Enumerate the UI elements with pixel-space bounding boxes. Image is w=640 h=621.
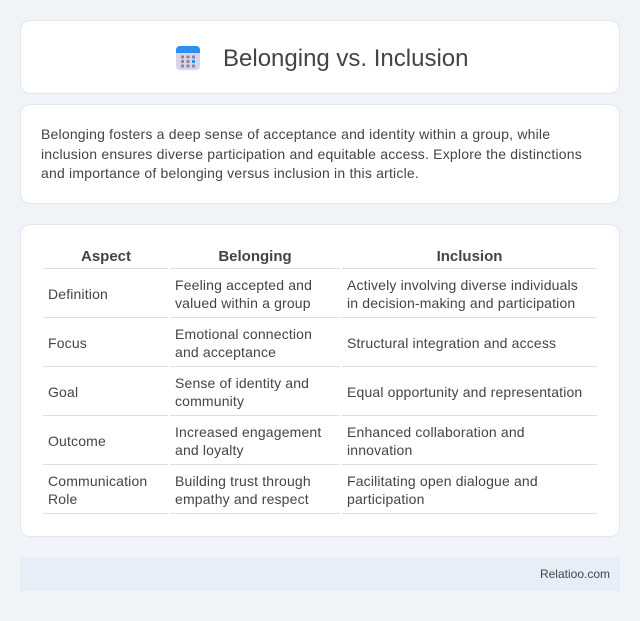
table header: Belonging: Belonging: [218, 248, 292, 265]
row: Communication Role: Communication: [48, 473, 147, 489]
Outcome: Inclusion: innovation: [347, 442, 412, 458]
Goal: Belonging: community: [175, 393, 244, 409]
Goal: Inclusion: Equal opportunity and representation: [347, 384, 582, 400]
intro text: inclusion ensures diverse participation and equitable access. Explore the distinctions: [41, 146, 582, 162]
title: Belonging vs. Inclusion: [223, 45, 468, 72]
Communication Role: Inclusion: participation: [347, 491, 425, 507]
row: Definition: Definition: [48, 286, 108, 302]
Goal: Belonging: Sense of identity and: [175, 375, 309, 391]
intro text: Belonging fosters a deep sense of acceptance and identity within a group, while: [41, 126, 550, 142]
Communication Role: Inclusion: Facilitating open dialogue and: [347, 473, 538, 489]
Definition: Belonging: Feeling accepted and: [175, 277, 312, 293]
Goal: Belonging: [175, 375, 309, 409]
row: Focus: Focus: [48, 335, 87, 351]
Definition: Inclusion: Actively involving diverse individuals: [347, 277, 578, 293]
Communication Role: Belonging: empathy and respect: [175, 491, 309, 507]
icon: calendar: [176, 46, 200, 70]
Outcome: Inclusion: [347, 424, 525, 458]
row: Goal: Goal: [48, 384, 78, 400]
row: Communication Role: Role: [48, 491, 77, 507]
Definition: Inclusion: in decision-making and participation: [347, 295, 575, 311]
Outcome: Belonging: and loyalty: [175, 442, 244, 458]
Communication Role: Belonging: Building trust through: [175, 473, 311, 489]
Focus: Belonging: and acceptance: [175, 344, 276, 360]
table header: Aspect: Aspect: [81, 248, 131, 265]
Communication Role: Belonging: [175, 473, 311, 507]
footer bar: [20, 557, 620, 591]
table header: Inclusion: Inclusion: [437, 248, 502, 265]
panel: comparison table card: [20, 224, 620, 537]
Definition: Belonging: [175, 277, 312, 311]
Outcome: Inclusion: Enhanced collaboration and: [347, 424, 525, 440]
Definition: Belonging: valued within a group: [175, 295, 311, 311]
Focus: Inclusion: Structural integration and access: [347, 335, 556, 351]
intro text: and importance of belonging versus inclusion in this article.: [41, 165, 419, 181]
Focus: Belonging: Emotional connection: [175, 326, 312, 342]
panel: title card: [20, 20, 620, 94]
row: Outcome: Outcome: [48, 433, 106, 449]
row: Communication Role: [48, 473, 147, 507]
Outcome: Belonging: [175, 424, 322, 458]
Definition: Inclusion: [347, 277, 578, 311]
Outcome: Belonging: Increased engagement: [175, 424, 321, 440]
Communication Role: Inclusion: [347, 473, 538, 507]
footer text: Relatioo.com: [540, 567, 610, 581]
intro text: [41, 126, 582, 181]
Focus: Belonging: [175, 326, 312, 360]
panel: intro card: [20, 104, 620, 204]
